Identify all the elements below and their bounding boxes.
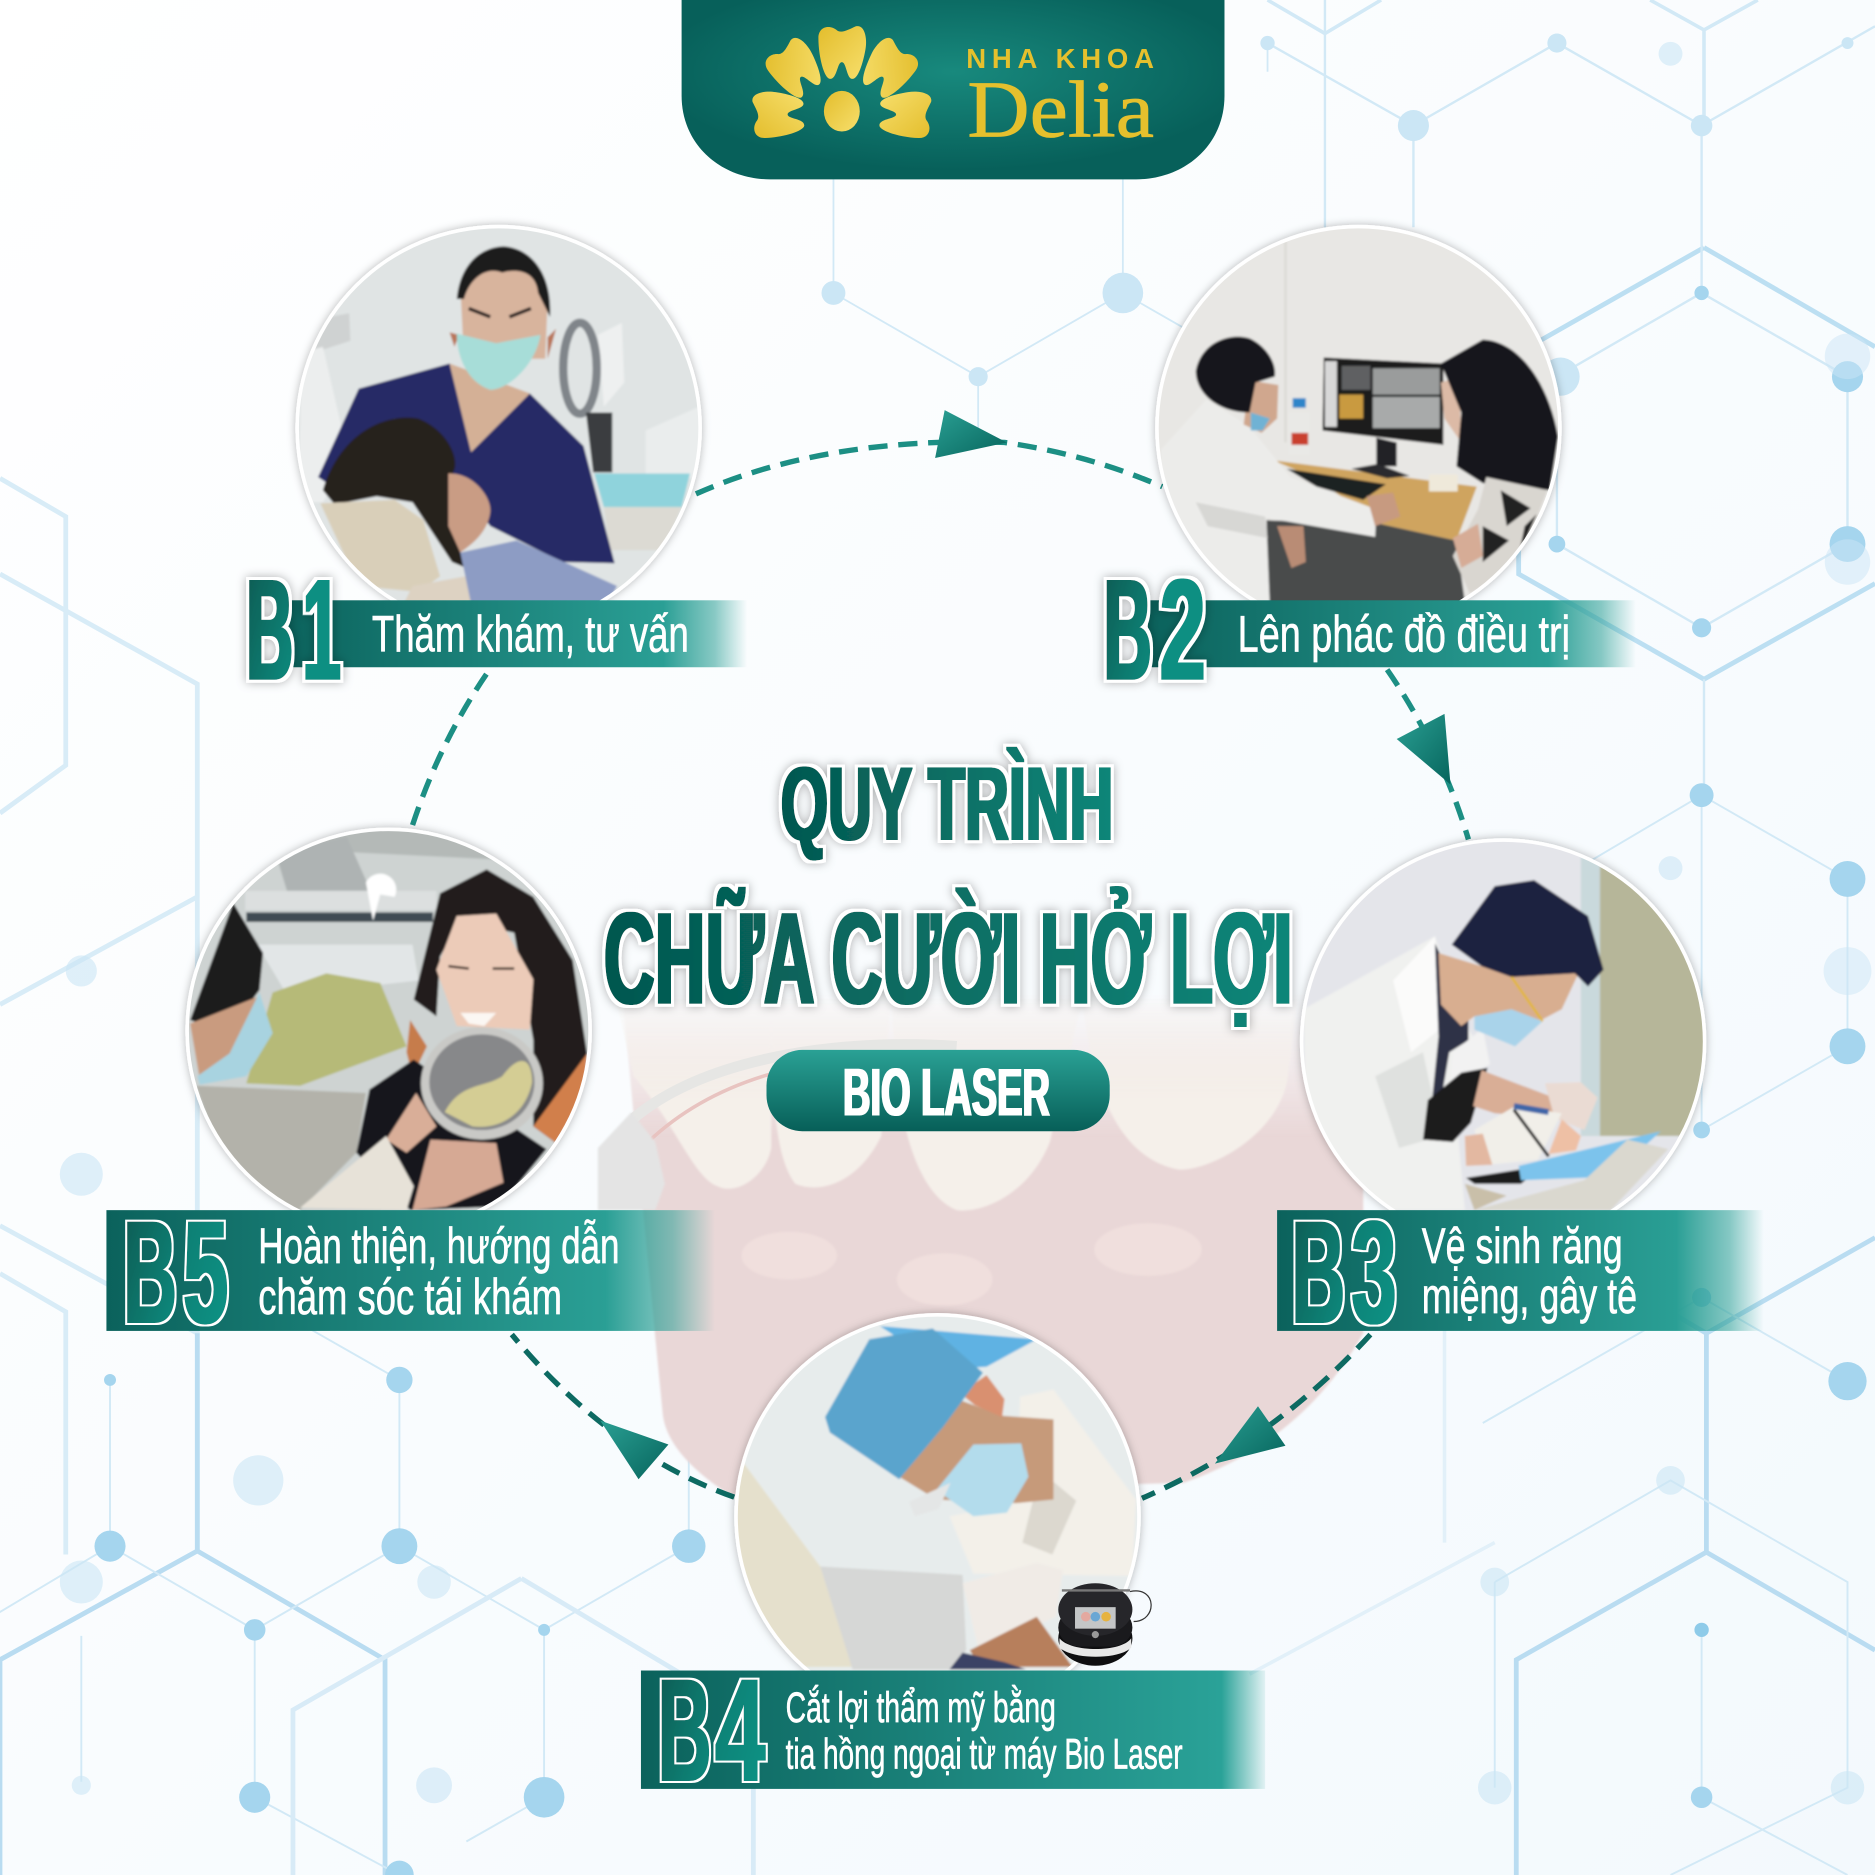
step number B5: 5: [183, 1191, 228, 1354]
step B1 banner: [246, 550, 747, 710]
step B4 banner: [641, 1649, 1265, 1812]
step number B3: 3: [1351, 1191, 1397, 1354]
badge: BIO LASER: BIO LASER: [843, 1055, 1050, 1131]
icon: Bio Laser machine: [1058, 1583, 1151, 1666]
step B5 banner: [106, 1191, 715, 1354]
step number B4: 4: [715, 1649, 765, 1812]
panel: B4 photo: [730, 1308, 1152, 1670]
icon: tooth flower logo: [752, 26, 932, 138]
step number B2: B: [1104, 550, 1152, 710]
step label B3: Vệ sinh răng: [1422, 1218, 1623, 1274]
logo text: Delia: Delia: [967, 66, 1154, 154]
step label B4: tia hồng ngoại từ máy Bio Laser: [786, 1731, 1183, 1779]
step label B5: [258, 1218, 619, 1325]
step number B1: B: [246, 550, 293, 710]
step number B4: B: [658, 1649, 711, 1812]
logo panel: [682, 0, 1224, 179]
badge: BIO LASER: [767, 1050, 1110, 1131]
panel: B3 photo: [1295, 834, 1711, 1210]
arrow 2: [1397, 714, 1450, 784]
step label B4: Cắt lợi thẩm mỹ bằng: [786, 1684, 1056, 1732]
step B3 banner: [1277, 1191, 1764, 1354]
step number B5: B: [123, 1191, 177, 1354]
arrow 3: [1215, 1406, 1285, 1464]
arrow 1: [935, 410, 1007, 458]
panel: B2 photo: [1150, 220, 1566, 600]
step B1 banner: 1: [303, 550, 341, 710]
panel: B5 photo: [179, 825, 598, 1238]
step label B4: [786, 1684, 1183, 1779]
step label B1: Thăm khám, tư vấn: [372, 605, 689, 663]
background faded teeth and laser handpiece: [598, 993, 1363, 1495]
title: QUY TRÌNH: QUY TRÌNH: [781, 746, 1113, 862]
step B2 banner: [1104, 550, 1636, 710]
step number B2: 2: [1160, 550, 1205, 710]
dashed process ring with arrows: [413, 410, 1468, 1498]
step label B5: Hoàn thiện, hướng dẫn: [258, 1218, 619, 1274]
step label B3: miệng, gây tê: [1422, 1268, 1637, 1324]
arrow 4: [600, 1421, 668, 1479]
panel: B1 photo: [290, 220, 707, 600]
step label B2: Lên phác đồ điều trị: [1238, 605, 1570, 663]
logo text: NHA KHOA: NHA KHOA: [966, 43, 1154, 74]
step label B3: [1422, 1218, 1637, 1324]
title: CHỮA CƯỜI HỞ LỢI: CHỮA CƯỜI HỞ LỢI: [604, 885, 1293, 1031]
step number B3: B: [1291, 1191, 1345, 1354]
step label B5: chăm sóc tái khám: [258, 1269, 562, 1325]
